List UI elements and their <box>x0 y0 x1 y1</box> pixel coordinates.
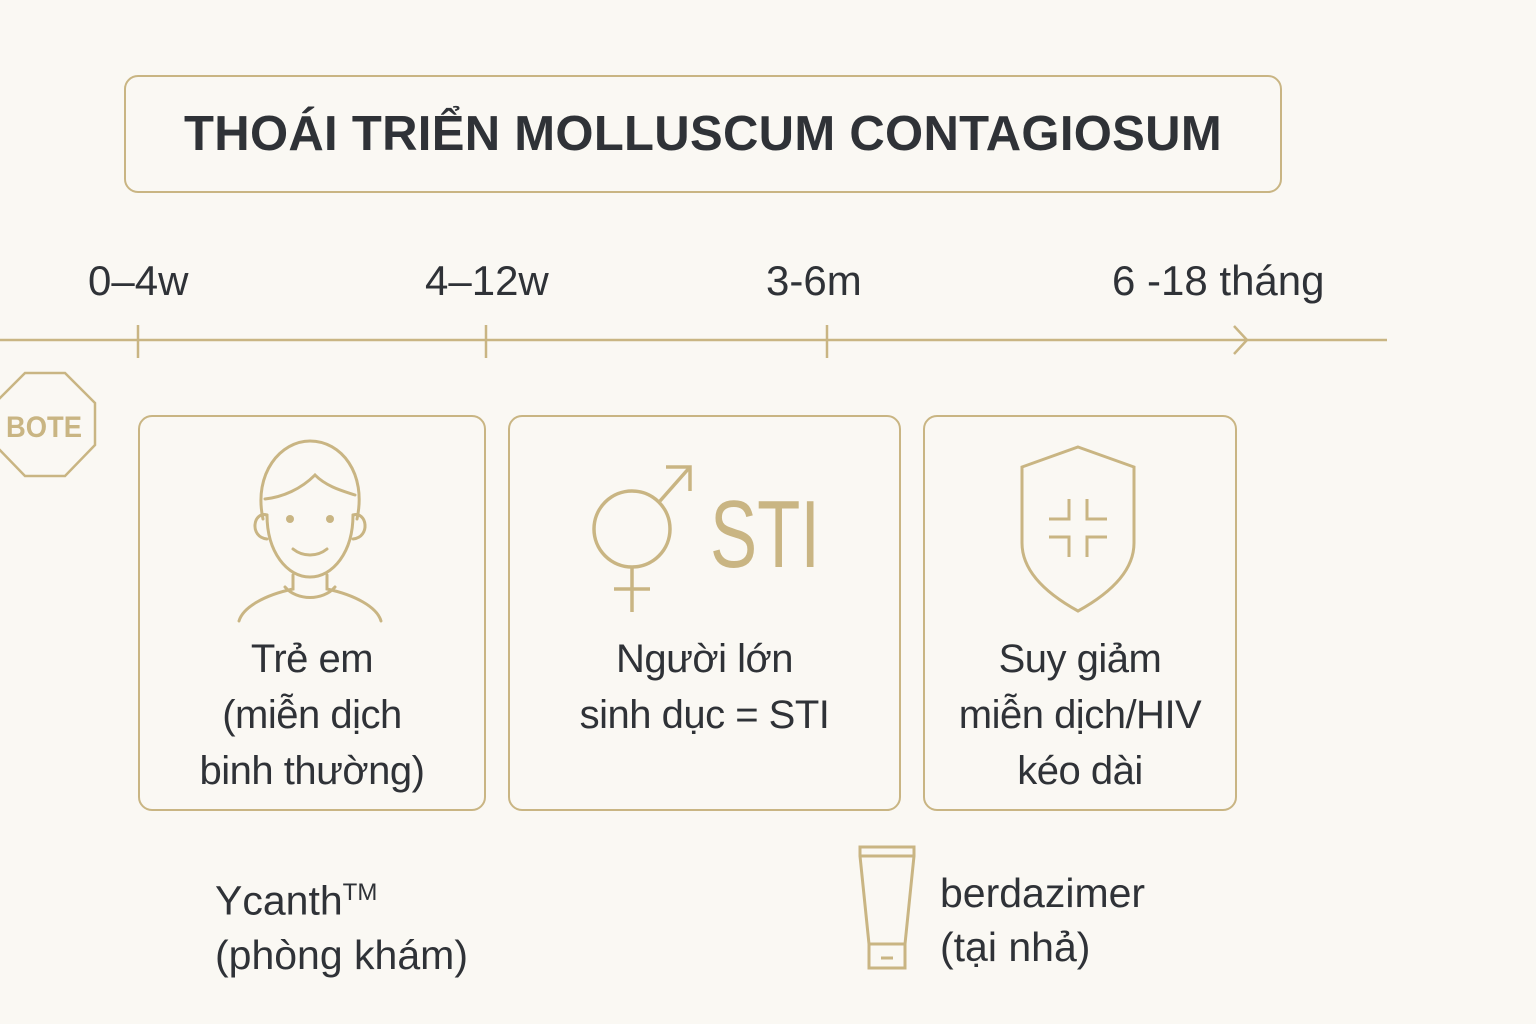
text: immunosuppressed <box>959 637 1202 793</box>
text: adults: sinh dục = STI <box>580 693 829 737</box>
treatment: Ycanth: (phòng khám) <box>215 932 468 978</box>
timeline label: 3-6m: 3-6m <box>766 257 862 304</box>
treatment: berdazimer: berdazimer <box>940 870 1145 916</box>
text: adults <box>580 637 829 737</box>
panel: immunosuppressed <box>923 415 1237 811</box>
icon: gender + STI <box>592 465 820 612</box>
treatment: Ycanth: YcanthTM <box>215 878 377 924</box>
icon: child face <box>238 440 382 622</box>
text: children: binh thường) <box>200 749 424 793</box>
icon: shield <box>1020 445 1136 613</box>
panel: children <box>138 415 486 811</box>
badge: BOTE octagon <box>0 372 96 478</box>
treatment: berdazimer: (tại nhả) <box>940 924 1090 970</box>
badge: BOTE octagon: BOTE <box>6 411 82 444</box>
text: immunosuppressed: miễn dịch/HIV <box>959 693 1201 737</box>
text: children <box>200 637 424 793</box>
timeline axis <box>0 325 1387 358</box>
title: THOÁI TRIỂN MOLLUSCUM CONTAGIOSUM <box>184 107 1222 161</box>
icon: tube <box>858 846 916 970</box>
panel: adults STI <box>508 415 901 811</box>
timeline label: 0-4w: 0–4w <box>88 257 188 304</box>
timeline label: 4-12w: 4–12w <box>425 257 549 304</box>
timeline label: 6-18 tháng: 6 -18 tháng <box>1112 257 1325 304</box>
text: children: (miễn dịch <box>222 693 402 737</box>
text: immunosuppressed: Suy giảm <box>999 637 1161 681</box>
treatment: berdazimer <box>940 870 1145 970</box>
title <box>124 75 1282 193</box>
text: children: Trẻ em <box>251 637 373 681</box>
text: adults: Người lớn <box>616 637 793 681</box>
text: immunosuppressed: kéo dài <box>1017 749 1143 793</box>
treatment: Ycanth <box>215 878 468 978</box>
